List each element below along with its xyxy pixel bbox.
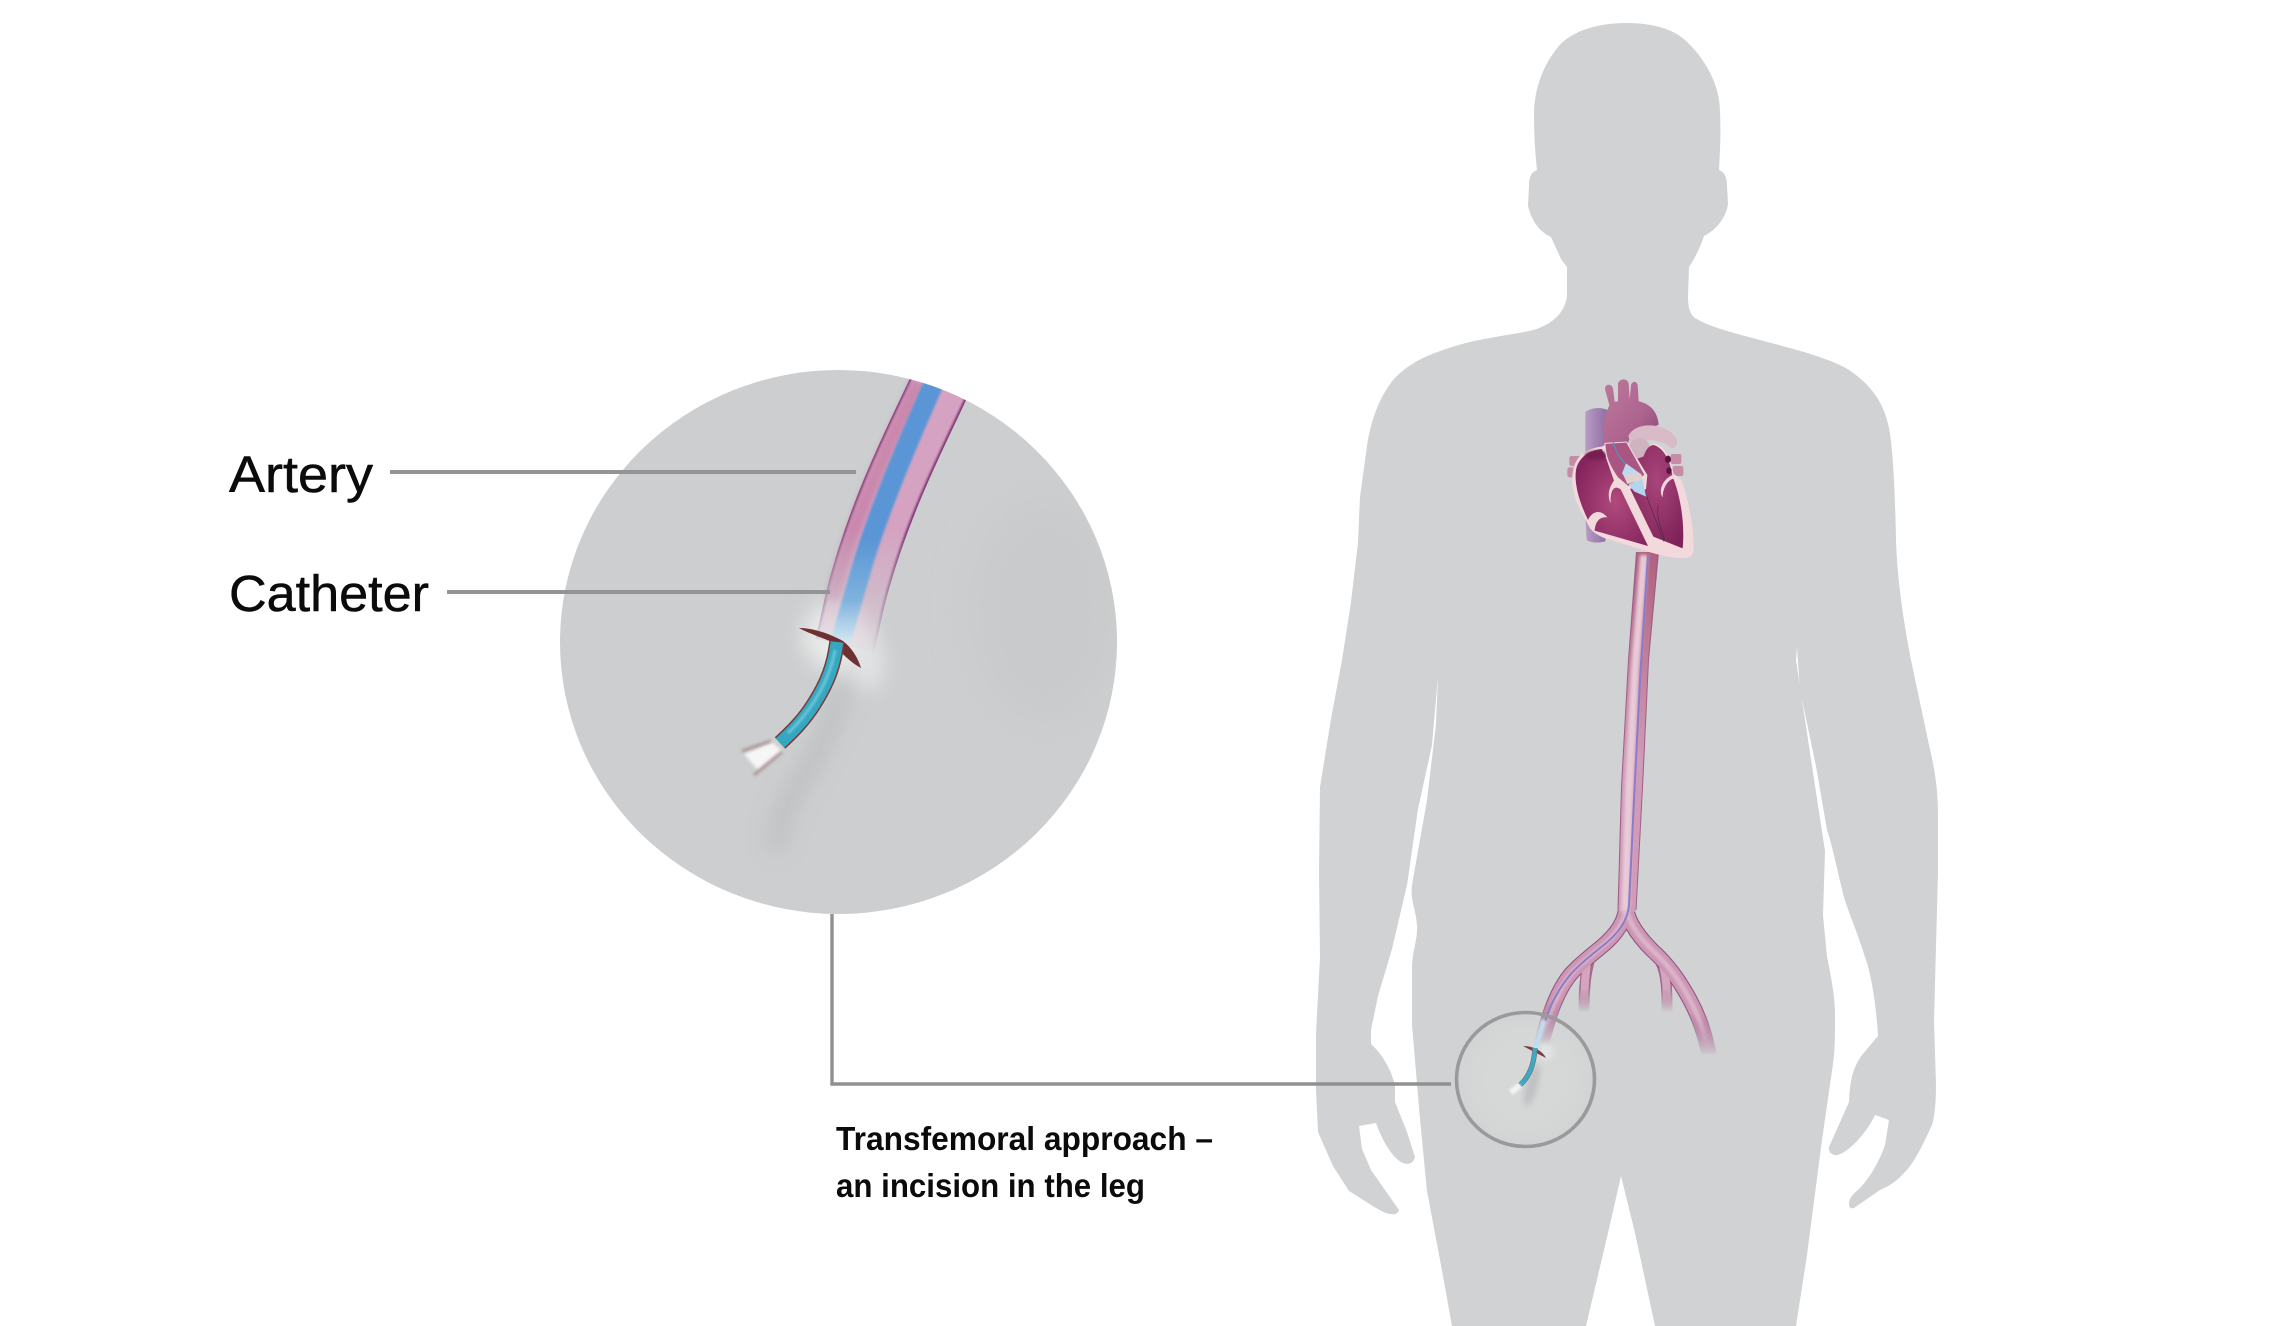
descending aorta outer [1618,552,1659,910]
heart illustration [1567,379,1694,558]
pulmonary artery [1628,425,1677,448]
iliac outlines [1541,905,1710,1058]
small circle outline [1456,1012,1594,1146]
internal iliac branch outlines [1584,958,1667,1012]
wire fading in the small circle [1536,1020,1544,1047]
catheter sheath [780,642,837,743]
catheter tip [742,741,782,775]
label: Artery: Artery [229,446,374,503]
shadow [1523,1064,1541,1106]
heart wall [1572,443,1694,558]
artery [832,378,943,645]
catheter tip [1509,1083,1522,1095]
pulmonary vein openings [1665,456,1671,463]
label: Catheter [229,565,830,622]
catheter sheath [1520,1048,1535,1085]
caption: transfemoral approach: an incision in the leg [836,1167,1145,1204]
iliac highlight [1546,912,1707,1042]
aortic root [1605,442,1645,487]
incision [799,628,861,668]
left-side chamber [1630,445,1683,548]
caption: transfemoral approach [836,1120,1213,1204]
body silhouette [1316,23,1938,1326]
shadow under catheter [777,685,842,850]
circle base [560,370,1117,914]
chordae [1647,497,1665,542]
catheter inside artery [841,378,936,640]
transcatheter valve [1613,442,1646,497]
small circle: catheter detail [1509,1044,1553,1108]
aortic arch [1603,379,1659,447]
vena cava [1585,408,1609,457]
label: Catheter: Catheter [229,565,429,622]
white glow around incision [802,600,874,672]
internal iliac branch fill [1580,964,1671,1002]
label: Artery [229,446,856,503]
atrium shading [1585,450,1607,460]
descending aorta body [1618,552,1658,912]
iliac fill [1542,912,1712,1038]
subtle shading right [975,500,1115,720]
pulmonary trunk [1629,438,1650,459]
guide wire [1545,555,1648,1022]
pulmonary vein stubs [1567,454,1683,477]
right-side chamber [1576,449,1648,546]
connector from large circle to small circle [832,914,1451,1084]
incision glow [1540,1046,1552,1058]
aorta highlight [1625,555,1644,912]
incision [1523,1046,1546,1058]
aorta and iliac arteries [1536,552,1710,1058]
large circle detail [560,370,1117,914]
caption: transfemoral approach: Transfemoral approach – [836,1120,1213,1157]
small circle fill: incision location [1456,1012,1594,1146]
